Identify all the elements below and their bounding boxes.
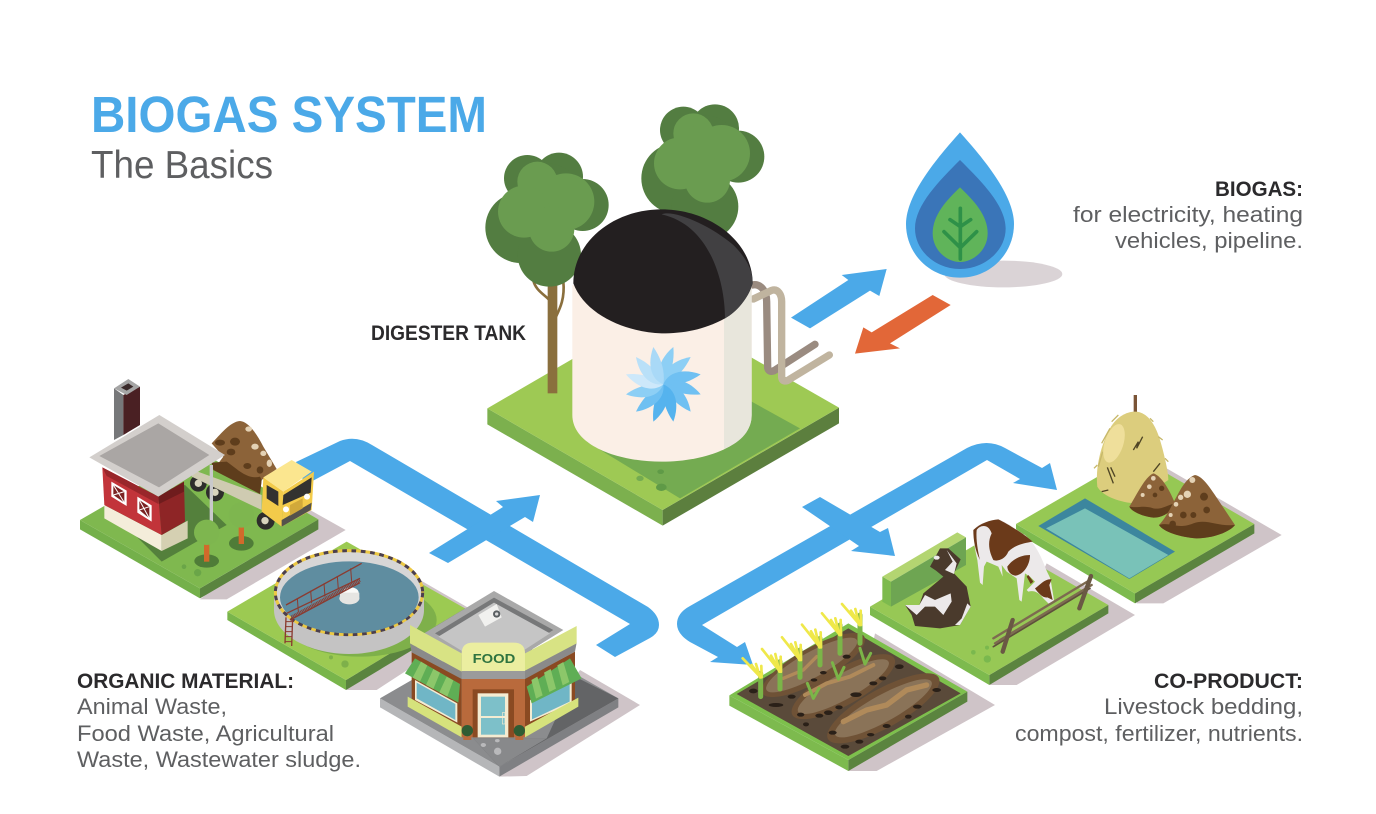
shop sign: FOOD — [473, 651, 515, 666]
biogas text block: vehicles, pipeline. — [1115, 228, 1303, 253]
farm platform — [80, 451, 346, 599]
bridge and ladder — [285, 563, 362, 646]
chimney — [114, 379, 140, 440]
clarifier tank — [274, 550, 424, 654]
truck with soil — [190, 421, 314, 530]
standing cow — [973, 519, 1054, 605]
arrow to digester — [429, 495, 540, 563]
biogas text block — [1073, 178, 1303, 253]
small compost pile — [1129, 473, 1175, 518]
soil and furrows — [737, 622, 961, 756]
pinwheel logo — [626, 347, 701, 422]
co-product text block: compost, fertilizer, nutrients. — [1015, 721, 1303, 746]
large compost pile — [1159, 475, 1235, 538]
organic material text block: Waste, Wastewater sludge. — [77, 747, 361, 772]
tree behind tank — [641, 104, 764, 240]
leaf — [933, 187, 988, 262]
planters — [462, 725, 525, 740]
small trees — [194, 502, 254, 568]
crop field scene — [729, 604, 995, 771]
post — [210, 465, 213, 522]
livestock scene — [870, 519, 1135, 685]
title: BIOGAS SYSTEM — [91, 86, 487, 143]
lying cow — [905, 548, 971, 628]
seedlings — [807, 648, 871, 698]
air conditioner — [478, 604, 502, 627]
hedge wall — [882, 532, 966, 607]
shop platform — [380, 630, 640, 777]
co-product text block: CO-PRODUCT: — [1154, 670, 1303, 693]
biogas text block: for electricity, heating — [1073, 202, 1303, 227]
organic material text block: ORGANIC MATERIAL: — [77, 670, 294, 693]
subtitle: The Basics — [91, 144, 273, 187]
wooden fence — [993, 576, 1092, 652]
wastewater plant scene — [227, 542, 640, 777]
organic material text block: Animal Waste, — [77, 694, 227, 719]
livestock platform — [870, 537, 1135, 685]
organic material text block: Food Waste, Agricultural — [77, 721, 334, 746]
biogas drop icon — [906, 132, 1062, 287]
barn — [89, 415, 225, 551]
digester platform — [487, 307, 839, 526]
return arrow — [855, 295, 951, 354]
co-product flow arrows — [677, 443, 1057, 665]
awnings — [405, 658, 582, 703]
farm scene — [80, 379, 346, 599]
tree beside tank — [485, 153, 609, 393]
co-product text block — [1015, 670, 1303, 746]
biogas outgoing arrow — [791, 269, 887, 328]
digester scene — [485, 104, 839, 526]
field platform — [729, 623, 995, 771]
organic material text block — [77, 670, 361, 772]
food shop — [405, 591, 582, 740]
digester label: DIGESTER TANK — [371, 322, 526, 345]
compost and pond scene — [1016, 395, 1282, 603]
plant platform — [227, 542, 487, 690]
haystack — [1094, 395, 1168, 503]
arrow to livestock — [802, 497, 895, 556]
shop sign — [462, 643, 525, 671]
pipes — [752, 285, 829, 381]
tank dome — [573, 209, 753, 333]
co-product text block: Livestock bedding, — [1104, 694, 1303, 719]
tank body — [572, 285, 752, 462]
corn plants — [743, 604, 861, 697]
pond — [1038, 498, 1175, 579]
pond platform — [1016, 455, 1282, 603]
main flow arrow: organic material — [296, 439, 659, 657]
biogas text block: BIOGAS: — [1215, 178, 1303, 201]
